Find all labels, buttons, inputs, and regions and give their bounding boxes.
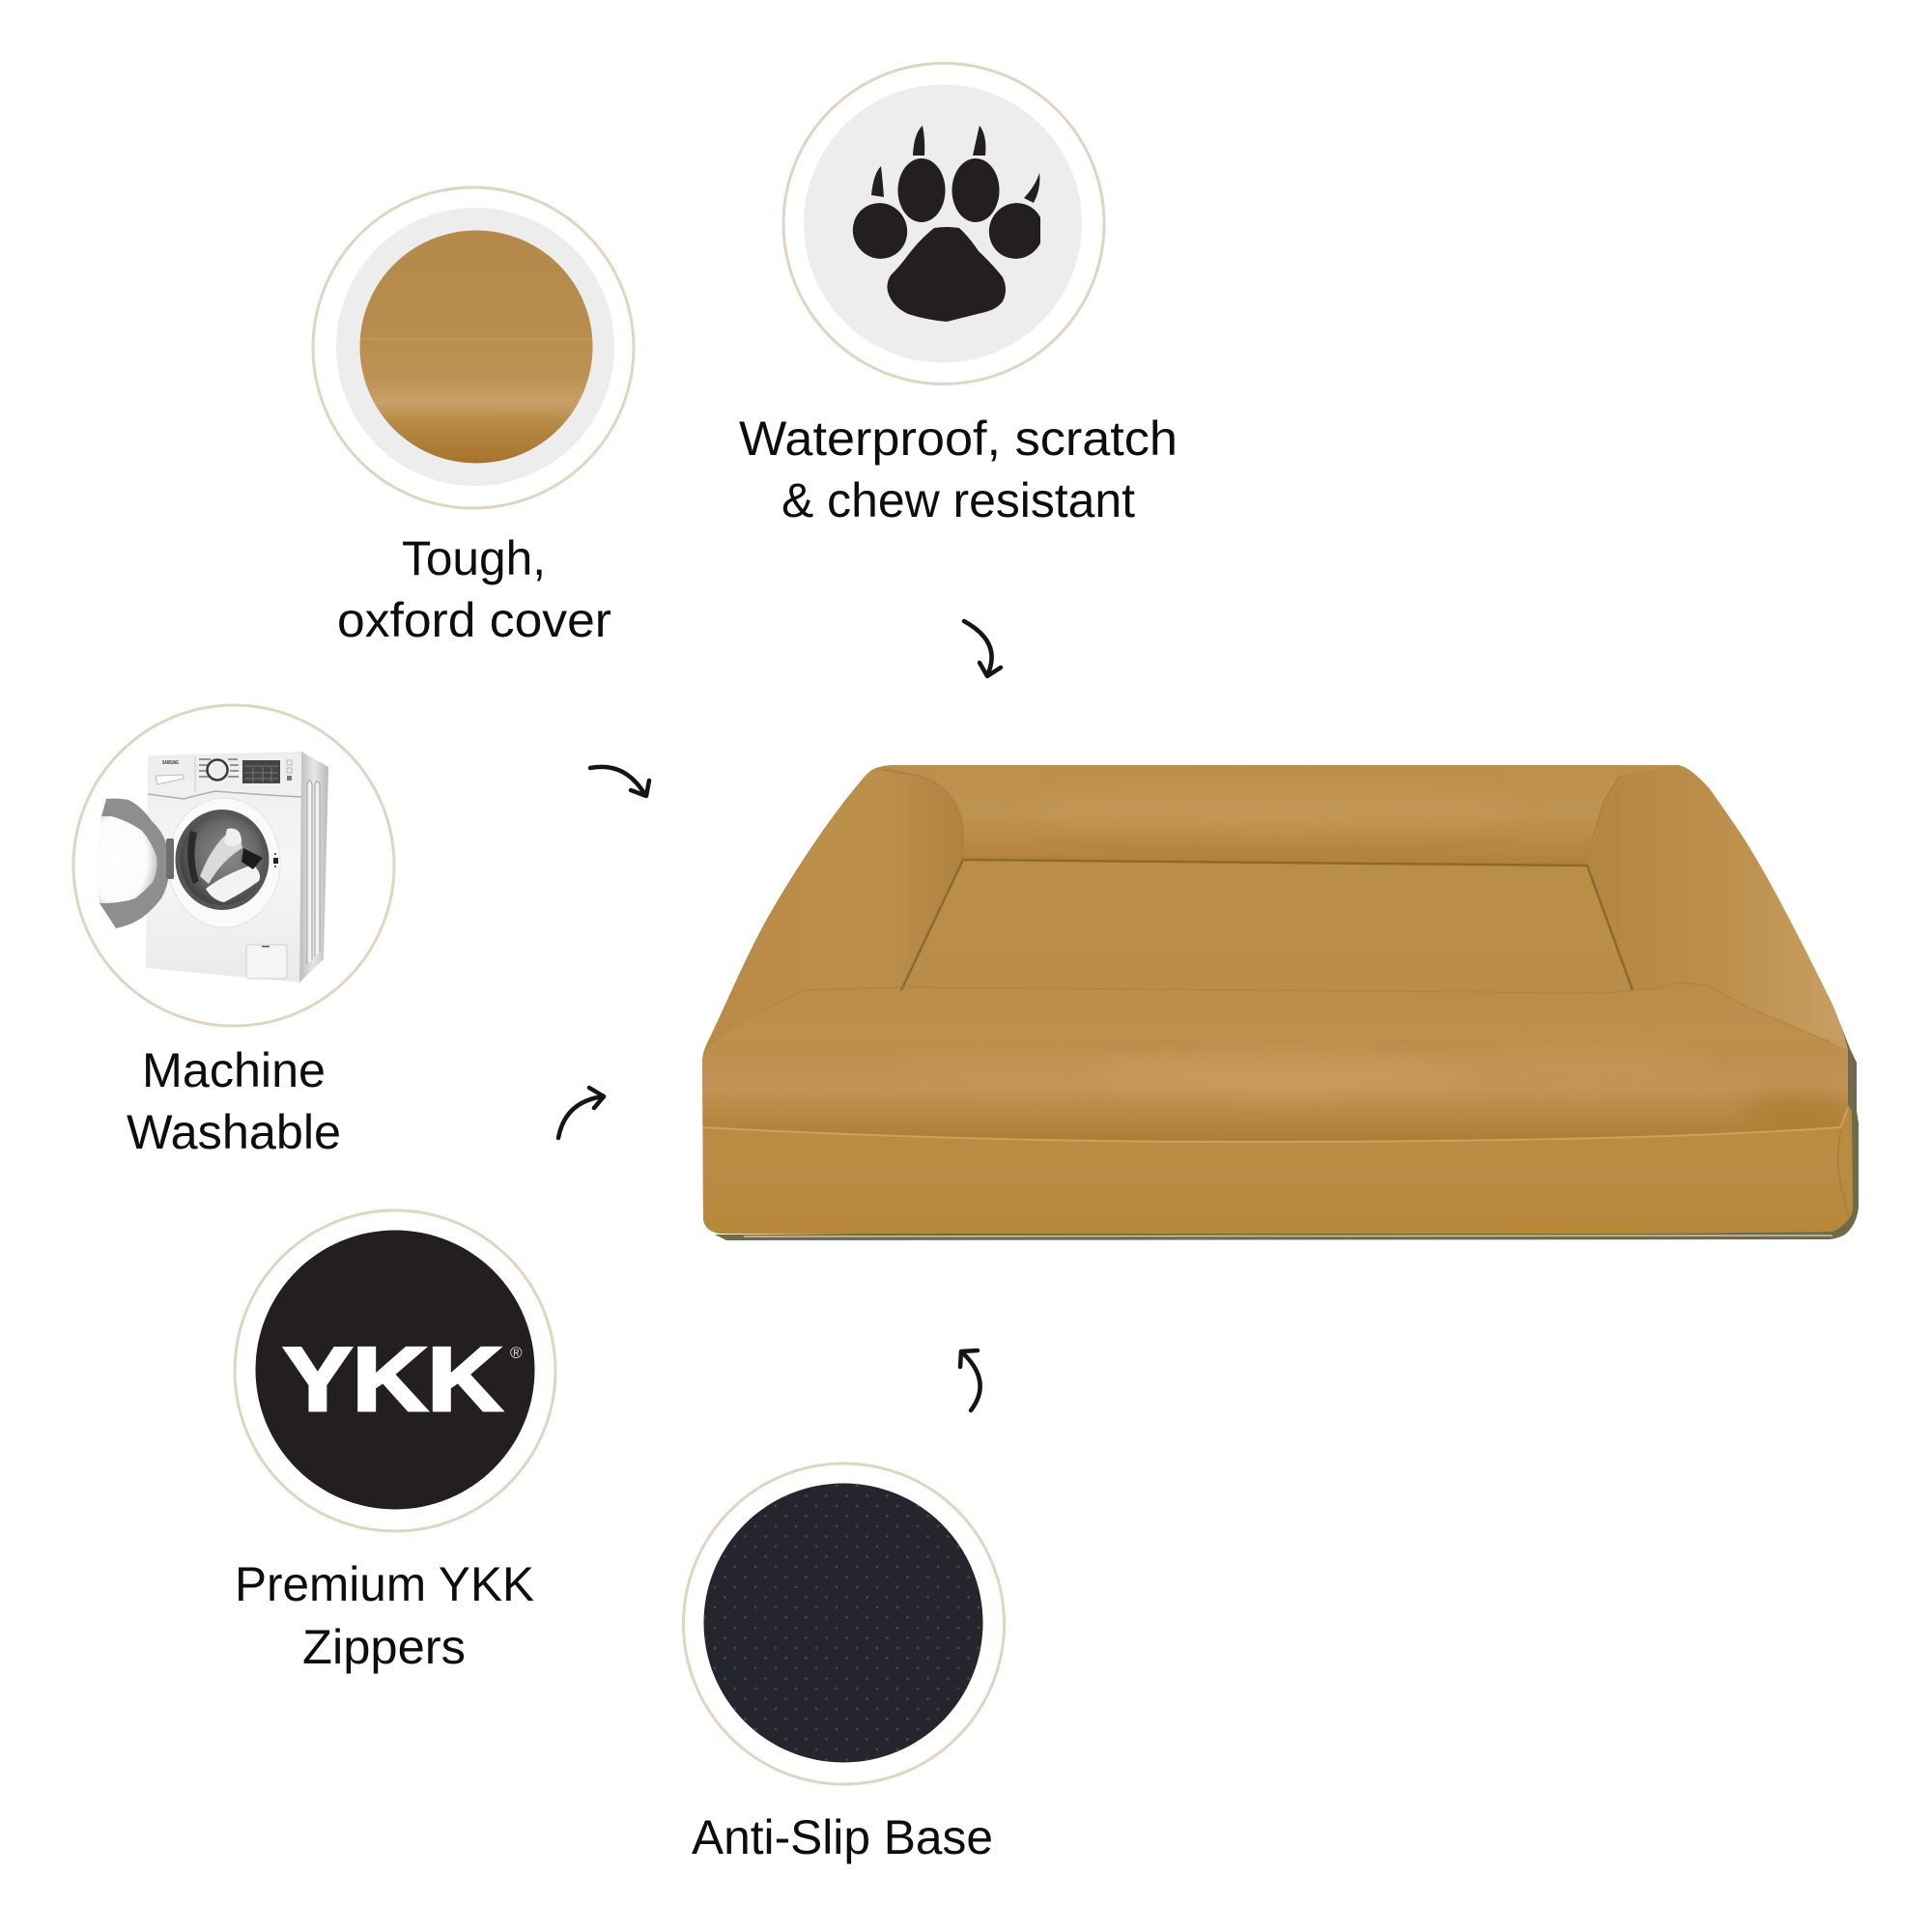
- seat outline: [901, 860, 1633, 990]
- arrow: machine washable to bed: [558, 1088, 604, 1138]
- label: Zippers: [302, 1620, 466, 1674]
- label: Premium YKK: [235, 1557, 534, 1611]
- registered mark: ®: [510, 1344, 523, 1362]
- panel: tough oxford cover: [313, 187, 634, 647]
- right arm: [1679, 765, 1848, 1050]
- badge ring: [73, 705, 394, 1026]
- back bolster: [882, 765, 1681, 866]
- drum: [176, 810, 269, 910]
- front highlights: [1121, 1057, 1843, 1124]
- arrow: oxford cover to bed: [590, 767, 649, 796]
- bed base shadow edge: [715, 1024, 1859, 1240]
- anti-slip dots: [703, 1484, 983, 1762]
- grey disc: [336, 208, 614, 486]
- label: Washable: [127, 1105, 341, 1159]
- machine side: [299, 752, 328, 982]
- label: oxford cover: [337, 593, 611, 647]
- label: Anti-Slip Base: [692, 1810, 993, 1864]
- machine front: [146, 752, 301, 982]
- latch: [273, 858, 278, 864]
- label: & chew resistant: [781, 473, 1135, 527]
- icon: washing machine: [97, 752, 328, 982]
- panel: machine washable: [73, 705, 394, 1159]
- black disc: [255, 1231, 535, 1509]
- open door ring: [99, 799, 170, 928]
- left arm: [696, 763, 963, 1063]
- seam line: [702, 1108, 1848, 1142]
- arrow: waterproof to bed: [964, 621, 1001, 676]
- drawer: [246, 945, 287, 979]
- product: gold dog bed: [696, 763, 1884, 1241]
- panel: waterproof, scratch and chew resistant: [739, 64, 1178, 527]
- badge ring: [313, 187, 634, 508]
- dark textured disc: [703, 1484, 983, 1762]
- hinge: [166, 838, 174, 879]
- brand mark: SAMSUNG: [162, 760, 179, 766]
- label: Machine: [142, 1043, 326, 1097]
- panel: anti-slip base: [684, 1463, 1005, 1864]
- badge ring: [684, 1463, 1005, 1784]
- label: Waterproof, scratch: [739, 412, 1178, 466]
- door bezel: [168, 798, 280, 927]
- icon: paw with claws: [852, 126, 1040, 322]
- fabric swatch: [359, 230, 593, 464]
- right end stitching: [1838, 1130, 1849, 1217]
- arrow: anti-slip base to bed: [960, 1350, 980, 1410]
- bed shading: [696, 763, 1884, 1241]
- label: Tough,: [402, 531, 546, 585]
- fabric weave: [702, 1038, 1848, 1113]
- door glass: [97, 816, 156, 903]
- seat: [901, 860, 1634, 995]
- grey disc: [804, 85, 1082, 363]
- arm seams: [882, 770, 1620, 858]
- front bolster top: [702, 1050, 1848, 1141]
- lower band: [702, 1113, 1853, 1234]
- control panel: [148, 791, 301, 799]
- side ridges: [307, 781, 320, 964]
- YKK logo: YKK: [283, 1328, 502, 1430]
- badge ring: [783, 64, 1104, 384]
- badge ring: [235, 1210, 555, 1531]
- panel: premium YKK zippers: [235, 1210, 555, 1674]
- front edge line: [760, 982, 1829, 1041]
- back bolster highlight: [1024, 790, 1526, 829]
- bed body: [702, 765, 1853, 1234]
